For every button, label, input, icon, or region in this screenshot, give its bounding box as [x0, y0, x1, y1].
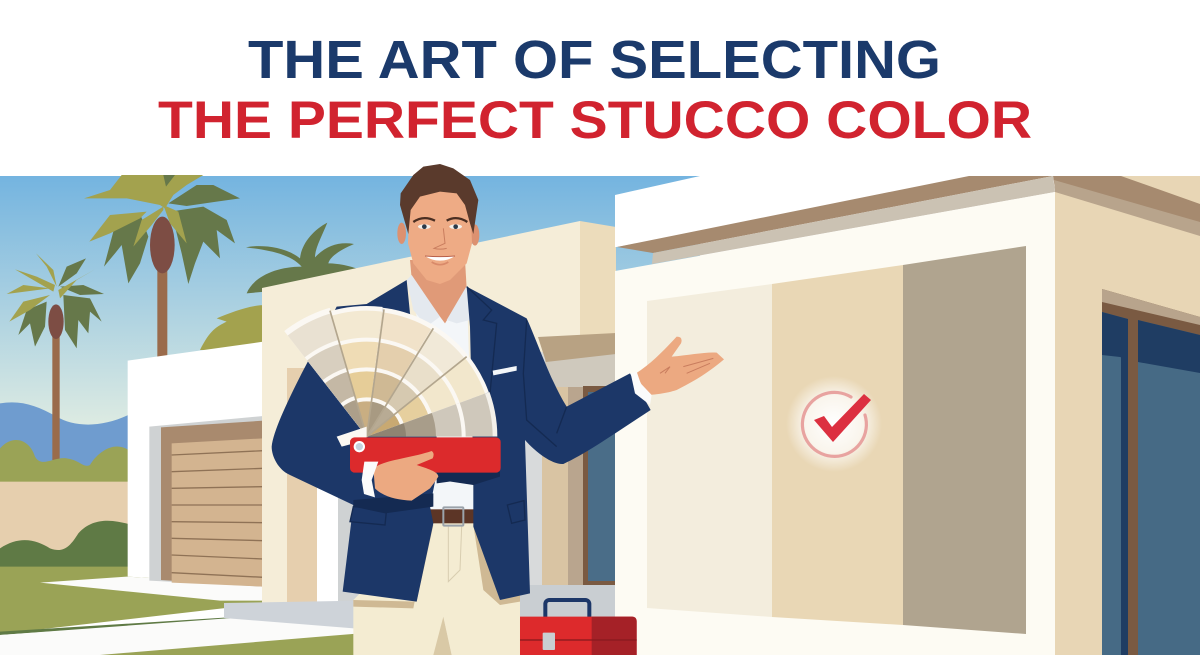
swatch panel: taupe — [903, 246, 1026, 634]
column and white recess — [287, 368, 317, 603]
trousers — [353, 523, 520, 655]
garage door — [161, 421, 263, 587]
checkmark badge — [786, 376, 882, 472]
palm: short — [7, 253, 104, 460]
dark hedge — [0, 521, 128, 568]
red toolbox — [520, 600, 637, 655]
title line 1: THE ART OF SELECTING — [248, 30, 941, 90]
beige house front — [262, 221, 580, 603]
lower lawn — [100, 633, 360, 655]
garage recess — [149, 416, 263, 587]
right side wall — [1055, 176, 1200, 655]
bushes — [0, 440, 128, 483]
large house at right — [615, 176, 1200, 655]
title — [158, 30, 1032, 150]
window — [1102, 289, 1200, 655]
fan blade 4 — [370, 330, 464, 434]
entry door — [542, 386, 616, 585]
porch wall — [520, 352, 616, 655]
jacket — [272, 280, 651, 602]
beige house side — [580, 221, 616, 340]
colour fan — [284, 306, 498, 447]
fan blade 3 — [368, 308, 431, 433]
swatch panel: sand — [772, 265, 903, 625]
white roof fascia — [615, 176, 1000, 247]
canopy underside — [545, 353, 616, 390]
mountains — [0, 402, 128, 470]
shirt — [410, 277, 474, 510]
neck — [410, 260, 467, 323]
front walkway — [0, 618, 360, 655]
white garage building — [128, 342, 263, 585]
eave on side — [1053, 176, 1200, 235]
fan blade 5 — [370, 357, 489, 436]
presenting hand — [631, 337, 724, 405]
title line 2: THE PERFECT STUCCO COLOR — [158, 91, 1032, 150]
palm: tall — [84, 175, 240, 357]
fan blade 2 — [331, 306, 383, 432]
lawn — [0, 567, 267, 634]
step — [224, 600, 400, 632]
olive shrub — [200, 305, 267, 350]
smile — [425, 256, 455, 261]
canopy — [538, 333, 616, 362]
white wall — [615, 192, 1055, 655]
background landscape — [0, 175, 360, 655]
beige house — [224, 221, 616, 655]
grey soffit — [652, 176, 1055, 264]
man presenting colour fan — [233, 164, 724, 655]
hair — [400, 164, 478, 234]
eyes and brows — [413, 218, 467, 229]
brown soffit — [617, 176, 1053, 253]
red fan handle — [350, 437, 501, 483]
palm: behind building — [246, 223, 360, 293]
belt — [430, 507, 477, 526]
fan blade 6 — [368, 392, 498, 437]
pocket square — [493, 366, 517, 375]
holding hand — [362, 451, 438, 501]
head — [397, 164, 479, 284]
collar — [407, 275, 470, 327]
fan blade 1 — [284, 308, 364, 429]
nose — [434, 228, 447, 249]
sky — [0, 176, 700, 476]
porch floor — [520, 585, 616, 655]
driveway — [40, 577, 263, 601]
garden wall — [0, 482, 128, 568]
swatch panel: cream — [647, 284, 772, 617]
